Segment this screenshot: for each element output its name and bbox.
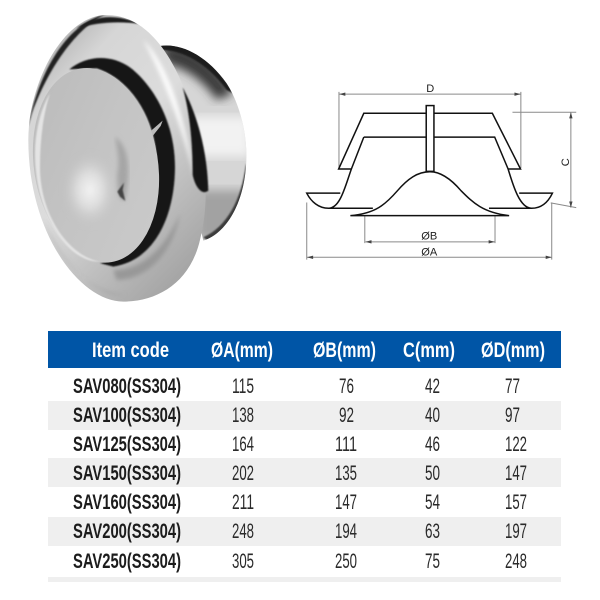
product photo: stainless steel disc valve [19,14,250,302]
row SAV250: 250 [335,550,357,573]
row SAV150 [73,462,527,485]
row SAV250: SAV250(SS304) [73,550,181,573]
flange reflections [28,14,197,295]
row SAV200: SAV200(SS304) [73,520,181,543]
row SAV160: 211 [232,491,254,514]
row SAV125: 164 [232,433,254,456]
row SAV125: 46 [425,433,440,456]
table [48,331,561,582]
row SAV150: 202 [232,462,254,485]
row SAV150: 50 [425,462,440,485]
row SAV125 [73,433,527,456]
table header: Item code [92,339,169,362]
row SAV080 [73,375,520,398]
row SAV250: 75 [425,550,440,573]
dimension labels: ØB [421,230,437,242]
row SAV125: 111 [335,433,357,456]
row SAV250: 305 [232,550,254,573]
row SAV100 [73,404,520,427]
row SAV080: SAV080(SS304) [73,375,181,398]
dimension lines [307,92,576,260]
dimension labels: D [426,83,434,95]
plate rim highlight [35,93,100,262]
row SAV200: 197 [505,520,527,543]
dimension arrows [307,92,573,259]
centre stem [426,106,434,171]
table header: ØB(mm) [313,339,376,362]
table header: C(mm) [403,339,455,362]
row SAV150: SAV150(SS304) [73,462,181,485]
table header [48,331,561,368]
flange base lines [329,206,532,211]
row SAV200: 194 [335,520,357,543]
dimension labels: C [560,158,572,166]
ring highlight [150,121,163,136]
dome centre dimple [117,183,125,201]
row SAV160: 147 [335,491,357,514]
row SAV150: 147 [505,462,527,485]
table header: ØA(mm) [211,339,273,362]
technical diagram [307,83,576,260]
rear cylinder collar [160,46,246,240]
centre plate [19,59,173,272]
dome disc [350,172,509,216]
row SAV100: 97 [505,404,520,427]
row SAV100: 40 [425,404,440,427]
dark gap ring [69,58,175,267]
row stripes [48,401,561,582]
row SAV160: 157 [505,491,527,514]
row SAV080: 42 [425,375,440,398]
row SAV160: 54 [425,491,440,514]
row SAV100: 92 [339,404,354,427]
dark side reflection on flange [183,87,208,192]
inner collar and flange profile [307,137,552,208]
row SAV125: SAV125(SS304) [73,433,181,456]
outer collar outline [339,113,521,169]
row SAV080: 115 [232,375,254,398]
row SAV080: 77 [505,375,520,398]
dimension labels [421,83,572,259]
row SAV125: 122 [505,433,527,456]
row SAV100: 138 [232,404,254,427]
row SAV160 [73,491,527,514]
table header: ØD(mm) [481,339,545,362]
row SAV150: 135 [335,462,357,485]
row SAV200 [73,520,527,543]
front flange [28,15,206,302]
row SAV200: 63 [425,520,440,543]
row SAV100: SAV100(SS304) [73,404,181,427]
row SAV080: 76 [339,375,354,398]
dimension labels: ØA [421,247,438,259]
row SAV250: 248 [505,550,527,573]
dome shadow [115,137,128,200]
row SAV200: 248 [232,520,254,543]
row SAV250 [73,550,527,573]
dome highlight [62,152,118,228]
row SAV160: SAV160(SS304) [73,491,181,514]
